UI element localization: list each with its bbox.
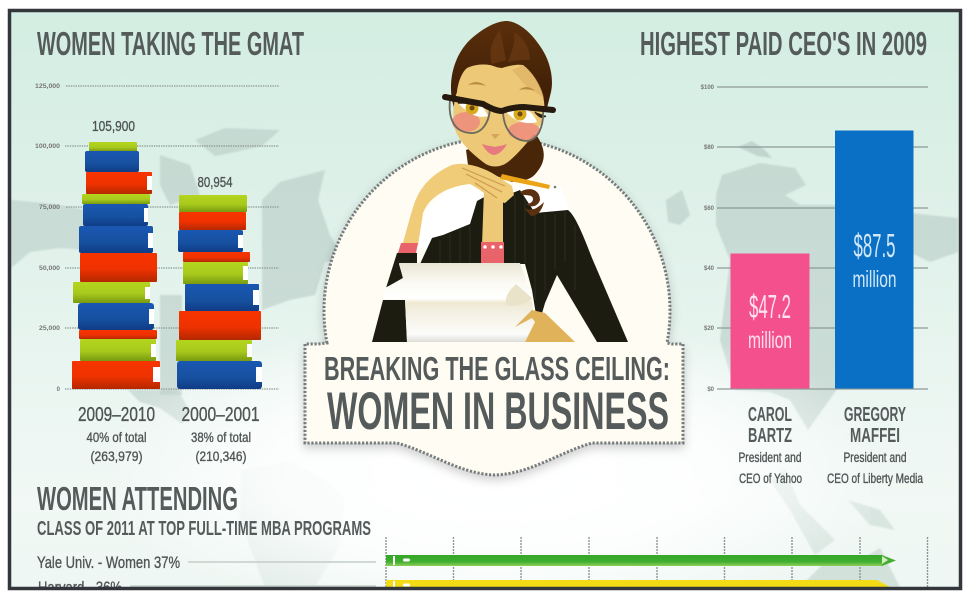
category labels: 2009–2010 (78, 404, 155, 426)
heading: women taking the GMAT: WOMEN TAKING THE GMAT (37, 25, 304, 62)
heading: women attending (37, 480, 371, 540)
paper fold (506, 284, 532, 306)
chart gridlines and axis labels: 0 (57, 387, 61, 393)
name label: Carol Bartz: CEO of Yahoo (739, 471, 802, 486)
category labels: 2000–2001 (182, 404, 260, 426)
cuff (398, 243, 418, 253)
name label: Gregory Maffei (827, 404, 923, 486)
category labels: (263,979) (90, 448, 142, 464)
book stack 2009-2010 (72, 142, 160, 389)
lower hand (515, 310, 575, 342)
bar chart vertical guides (386, 537, 928, 587)
CEO chart gridlines and axis labels (701, 85, 928, 393)
name label: Gregory Maffei: President and (844, 450, 906, 465)
heading: women attending: WOMEN ATTENDING (37, 480, 238, 517)
category labels: 40% of total (86, 429, 146, 445)
blazer (372, 190, 628, 342)
pencil bar: Harvard 36% (386, 580, 890, 587)
bar: Carol Bartz: million (748, 327, 792, 353)
book stack 2000-2001 (176, 195, 262, 389)
chart: MBA programs pencil bars (37, 537, 928, 587)
CEO chart gridlines and axis labels: $20 (704, 326, 715, 332)
bar: Gregory Maffei: $87.5 (854, 227, 896, 264)
finger lines (462, 168, 505, 198)
CEO chart gridlines and axis labels: $80 (704, 145, 715, 151)
CEO chart gridlines and axis labels: $40 (704, 266, 715, 272)
category labels (78, 404, 260, 464)
chart gridlines and axis labels: 75,000 (39, 205, 61, 211)
chart gridlines and axis labels (35, 84, 279, 393)
glasses (445, 97, 553, 141)
blazer pinstripes (440, 196, 575, 300)
nose and lips (482, 134, 507, 155)
hair bun (466, 128, 544, 182)
eyes (458, 100, 546, 123)
title text: BREAKING THE GLASS CEILING: (324, 351, 670, 388)
name label: Carol Bartz: CAROL (748, 404, 792, 426)
value labels: 105,900 (92, 118, 135, 135)
forehead shade and brows (468, 65, 544, 98)
name label: Carol Bartz (738, 404, 802, 486)
hair (451, 21, 552, 112)
row labels (37, 556, 376, 587)
paper (383, 263, 535, 342)
name label: Gregory Maffei: CEO of Liberty Media (827, 471, 923, 486)
chart gridlines and axis labels: 50,000 (39, 266, 61, 272)
name label: Gregory Maffei: GREGORY (844, 404, 906, 426)
pencil (500, 174, 550, 189)
chart gridlines and axis labels: 25,000 (39, 326, 61, 332)
title badge: circle and banner (305, 138, 683, 475)
hair highlight (490, 30, 530, 64)
value labels: 80,954 (198, 174, 232, 191)
name label: Gregory Maffei: MAFFEI (850, 425, 900, 447)
hair curl (520, 189, 544, 216)
row labels: Yale Univ. - Women 37% (37, 553, 180, 572)
title text (324, 351, 670, 441)
bar: Gregory Maffei: million (852, 266, 896, 292)
title text: WOMEN IN BUSINESS (327, 382, 669, 441)
CEO chart gridlines and axis labels: $100 (701, 85, 715, 91)
arm and hand (403, 164, 514, 245)
category labels: (210,346) (196, 448, 246, 464)
world map backdrop (11, 128, 958, 587)
name label: Carol Bartz: President and (738, 450, 802, 465)
neck and top (481, 190, 504, 264)
chart: highest paid CEOs bars (701, 85, 928, 486)
chart: women taking the GMAT book stacks (35, 84, 279, 464)
heading: women attending: CLASS OF 2011 AT TOP FULL-TIME MBA PROGRAMS (37, 517, 371, 540)
soft white glow behind the lower centre (120, 300, 870, 587)
chart gridlines and axis labels: 100,000 (35, 144, 61, 150)
bar: Carol Bartz (730, 254, 810, 388)
bar: Gregory Maffei (835, 130, 914, 388)
bar: Carol Bartz: $47.2 (749, 288, 791, 325)
blush (452, 112, 540, 140)
illustration: businesswoman (372, 21, 628, 342)
name label: Carol Bartz: BARTZ (748, 425, 792, 447)
CEO chart gridlines and axis labels: $0 (707, 387, 715, 393)
category labels: 38% of total (191, 429, 251, 445)
face (453, 64, 544, 166)
row labels: Harvard - 36% (38, 578, 122, 597)
value labels (92, 118, 232, 191)
white shirt collar (418, 182, 572, 255)
chart gridlines and axis labels: 125,000 (35, 84, 61, 90)
CEO chart gridlines and axis labels: $60 (704, 206, 715, 212)
pencil tip (554, 186, 556, 188)
pencil bar: Yale 37% (386, 555, 896, 566)
